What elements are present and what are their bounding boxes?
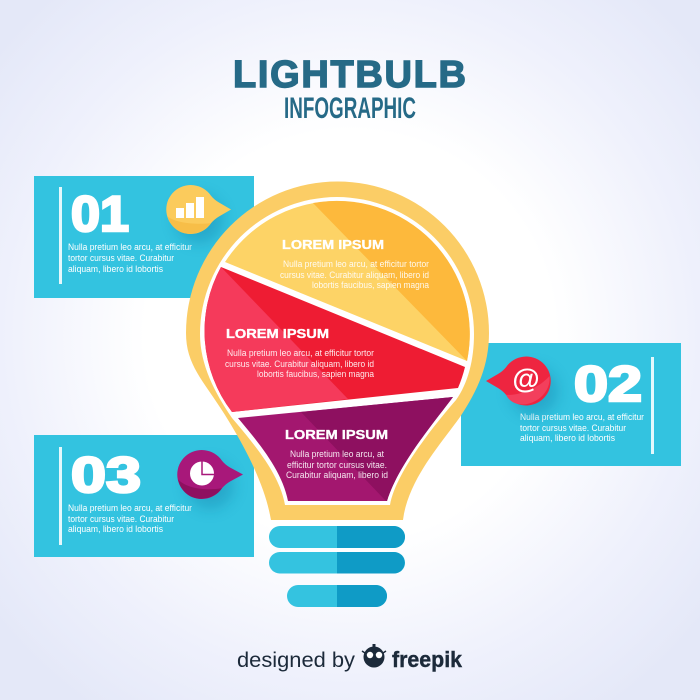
title <box>233 54 466 125</box>
panel 01: aliquam, libero id lobortis <box>68 264 164 274</box>
segment: purple: efficitur tortor cursus vitae. <box>287 460 387 470</box>
panel 03: Nulla pretium leo arcu, at efficitur <box>68 503 192 513</box>
segment: red: lobortis faucibus, sapien magna <box>257 369 374 379</box>
segment: red: cursus vitae. Curabitur aliquam, libero id <box>225 359 374 369</box>
icon: at sign pin: @ <box>512 363 540 394</box>
panel 02: tortor cursus vitae. Curabitur <box>520 423 626 433</box>
segment: yellow: cursus vitae. Curabitur aliquam, libero id <box>280 270 429 280</box>
bulb outer glass <box>186 182 489 520</box>
icon: bar chart pin <box>166 185 231 234</box>
title: INFOGRAPHIC <box>284 92 416 125</box>
panel 02: 02 <box>574 356 642 412</box>
icon: pie chart pin <box>177 450 243 499</box>
segment: yellow: lobortis faucibus, sapien magna <box>312 280 429 290</box>
panel 01: tortor cursus vitae. Curabitur <box>68 253 174 263</box>
segment: red <box>205 267 465 412</box>
credit: designed by freepik: freepik <box>392 647 463 672</box>
segment: yellow <box>225 201 470 361</box>
segment: purple: Curabitur aliquam, libero id <box>286 470 388 480</box>
panel 01: Nulla pretium leo arcu, at efficitur <box>68 242 192 252</box>
icon: at sign pin <box>486 356 551 406</box>
segment: purple: Nulla pretium leo arcu, at <box>290 449 384 459</box>
title: LIGHTBULB <box>233 54 466 96</box>
panel 01: 01 <box>71 186 129 242</box>
panel 02 <box>461 343 681 466</box>
segment: purple <box>238 397 453 501</box>
credit: designed by freepik: designed by <box>237 648 355 672</box>
panel 02: Nulla pretium leo arcu, at efficitur <box>520 412 644 422</box>
panel 01 <box>34 176 254 298</box>
segment: red: Nulla pretium leo arcu, at efficitur tortor <box>227 348 374 358</box>
pin shadows <box>175 195 558 509</box>
segment: yellow: Nulla pretium leo arcu, at efficitur tortor <box>283 259 429 269</box>
panel 02: aliquam, libero id lobortis <box>520 433 616 443</box>
credit: designed by freepik <box>237 644 463 672</box>
segment: purple: LOREM IPSUM <box>285 427 388 442</box>
bulb white ring <box>200 197 474 505</box>
icon: freepik mascot <box>362 644 386 668</box>
panel 03: tortor cursus vitae. Curabitur <box>68 514 174 524</box>
segment: yellow: LOREM IPSUM <box>282 237 384 252</box>
panel 03: aliquam, libero id lobortis <box>68 524 164 534</box>
lightbulb <box>186 182 489 607</box>
segment: red: LOREM IPSUM <box>226 326 329 341</box>
panel 03: 03 <box>71 447 141 503</box>
panel 03 <box>34 435 254 557</box>
bulb screw base <box>269 526 405 607</box>
